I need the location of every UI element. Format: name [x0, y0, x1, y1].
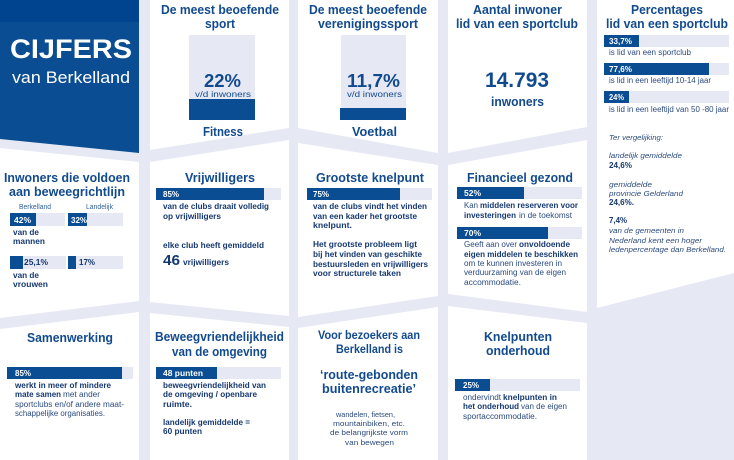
label: fitness: Fitness — [203, 125, 243, 139]
panel: samenwerking — [0, 312, 139, 460]
text block: het onderhoud — [463, 402, 519, 411]
text block: werkt in meer of mindere — [14, 381, 112, 390]
text block: schappelijke organisaties. — [15, 409, 105, 418]
text block — [163, 381, 266, 436]
text block: onvoldoende middelen: onvoldoende — [519, 240, 571, 249]
text block: ter vergelijking: ledenpercentage dan Berkelland. — [609, 245, 726, 254]
heading: Beweegvriendelijkheid — [155, 330, 284, 344]
text block: onvoldoende middelen: accommodatie. — [464, 278, 521, 287]
heading: Vrijwilligers — [185, 171, 255, 185]
text block: met ander — [63, 390, 100, 399]
heading: onderhoud — [486, 344, 550, 358]
heading: Percentages — [631, 3, 703, 17]
bar: 52% — [457, 187, 582, 199]
text block: onvoldoende middelen: Geeft aan over — [464, 240, 517, 249]
text block: reserveren: Kan — [464, 201, 478, 210]
bar chart: fitness 22%: 22% — [204, 71, 241, 91]
bar: 85% — [7, 367, 133, 379]
text block: ter vergelijking: 7,4% — [609, 216, 627, 225]
panel: de meest beoefende verenigingssport — [298, 0, 438, 153]
heading — [318, 330, 420, 356]
text block: landelijk gemiddelde = — [163, 418, 250, 427]
heading: Aantal inwoner — [473, 3, 562, 17]
panel: aantal inwoner lid van een sportclub — [448, 0, 587, 153]
heading: sport — [205, 17, 236, 31]
stat: 46 vrijwilligers: vrijwilligers — [183, 258, 230, 267]
bars: vrouwen — [10, 256, 123, 289]
text block: op vrijwilligers — [163, 212, 222, 221]
text block: ruimte. — [163, 400, 192, 409]
bar: 77,6% — [604, 63, 729, 85]
text block: ter vergelijking: provincie Gelderland — [608, 189, 684, 198]
heading — [456, 3, 578, 31]
heading: De meest beoefende — [309, 3, 427, 17]
text block: knelpunt. — [313, 221, 352, 230]
panel: knelpunten onderhoud — [448, 306, 587, 460]
text block: van de clubs draait volledig — [163, 202, 269, 211]
heading: van de omgeving — [172, 345, 267, 359]
panel: title banner — [0, 0, 139, 153]
text block: reserveren: investeringen — [464, 211, 516, 220]
bar: 75% — [307, 188, 432, 200]
text block: beweegvriendelijkheid van — [163, 381, 266, 390]
title: CIJFERS: CIJFERS — [10, 34, 132, 64]
text block: wandelen, fietsen, — [335, 410, 395, 419]
bar: 33,7%: 33,7% — [609, 37, 632, 46]
bars: vrouwen: van de — [13, 271, 40, 280]
heading: Samenwerking — [27, 331, 113, 345]
text block: sportaccommodatie. — [463, 412, 537, 421]
text block: ter vergelijking: gemiddelde — [609, 180, 652, 189]
bars: mannen: van de — [13, 228, 40, 237]
legend: Berkelland / Landelijk: Landelijk — [86, 204, 113, 211]
text block: de omgeving / openbare — [163, 390, 258, 399]
heading — [155, 330, 284, 359]
bar: 25% — [455, 379, 580, 391]
text block: mate samen — [15, 390, 61, 399]
heading: Voor bezoekers aan — [318, 330, 420, 342]
bar: 52%: 52% — [464, 189, 481, 198]
subtitle: van Berkelland — [12, 69, 130, 87]
bar chart: voetbal 11,7%: 11,7% — [347, 71, 400, 91]
heading: Financieel gezond — [467, 171, 573, 185]
text block: de belangrijkste vorm — [330, 428, 408, 437]
text block: 60 punten — [163, 427, 202, 436]
text block: ter vergelijking — [608, 133, 726, 254]
text block: ter vergelijking: 24,6%. — [609, 198, 634, 207]
panel: grootste knelpunt — [298, 143, 438, 317]
heading: Berkelland is — [336, 344, 403, 356]
heading: Knelpunten — [484, 330, 552, 344]
highlight: route-gebonden buitenrecreatie: ‘route-gebonden — [320, 368, 418, 382]
heading: lid van een sportclub — [456, 17, 578, 31]
label: voetbal: Voetbal — [352, 125, 397, 139]
text block: ter vergelijking: 24,6% — [609, 161, 632, 170]
heading: aan beweegrichtlijn — [9, 185, 125, 199]
text block: mountainbiken, etc. — [333, 419, 405, 428]
bar: 70%: 70% — [464, 229, 481, 238]
heading: Grootste knelpunt — [316, 171, 425, 185]
panel: voor bezoekers aan Berkelland — [298, 307, 438, 460]
text block: ter vergelijking: Ter vergelijking: — [609, 133, 663, 142]
heading — [484, 330, 552, 358]
text block: ondervindt — [463, 393, 502, 402]
panel: inwoners die voldoen aan beweegrichtlijn — [0, 148, 139, 318]
text block: reserveren: in de toekomst — [519, 211, 573, 220]
text block — [330, 410, 408, 447]
bars: mannen: mannen — [13, 237, 45, 246]
text block — [14, 381, 124, 418]
bar: 48 punten: 48 punten — [163, 369, 203, 378]
text block: elke club heeft gemiddeld — [163, 241, 264, 250]
bar: 70% — [457, 227, 582, 239]
text block: onvoldoende middelen: om te kunnen investeren in — [464, 259, 562, 268]
panel: de meest beoefende sport — [150, 0, 289, 150]
bar: 85%: 85% — [15, 369, 31, 378]
bar: 25%: 25% — [463, 381, 479, 390]
heading — [309, 3, 427, 31]
highlight: route-gebonden buitenrecreatie: buitenrecreatie’ — [322, 382, 416, 396]
text block: reserveren: middelen reserveren voor — [480, 201, 578, 210]
bar chart: fitness 22%: v/d inwoners — [195, 89, 251, 99]
bar: 85%: 85% — [163, 190, 179, 199]
text block: knelpunten in — [503, 393, 557, 402]
bars: mannen — [10, 213, 123, 246]
legend: Berkelland / Landelijk: Berkelland — [19, 204, 51, 211]
big number: 14.793 — [485, 69, 549, 92]
text block: ter vergelijking: landelijk gemiddelde — [609, 151, 682, 160]
stat: 46 vrijwilligers — [163, 252, 230, 269]
text block: van de clubs vindt het vinden — [313, 202, 427, 211]
heading: lid van een sportclub — [606, 17, 728, 31]
panel: vrijwilligers — [150, 140, 289, 316]
highlight: route-gebonden buitenrecreatie — [320, 368, 418, 396]
bars: vrouwen: vrouwen — [13, 280, 48, 289]
bar: 75%: 75% — [313, 190, 329, 199]
heading: Inwoners die voldoen — [4, 171, 130, 185]
text block: sportclubs en/of andere maat- — [15, 400, 124, 409]
bar: 33,7% — [604, 35, 729, 57]
bar: 24%: is lid in een leeftijd van 50 -80 jaar — [609, 105, 729, 114]
bar: 24% — [604, 91, 729, 114]
text block: van de eigen — [521, 402, 567, 411]
text block: onvoldoende middelen: verduurzaming van de eigen — [464, 268, 566, 277]
bar: 85% — [156, 188, 281, 200]
panel: percentages lid van een sportclub — [597, 0, 734, 308]
text block: bij het vinden van geschikte — [313, 250, 423, 259]
bar: 77,6%: 77,6% — [609, 65, 632, 74]
bar chart: voetbal 11,7% — [340, 35, 406, 120]
bar: 33,7%: is lid van een sportclub — [609, 48, 692, 57]
bar: 77,6%: is lid in een leeftijd 10-14 jaar — [609, 76, 711, 85]
text block: van bewegen — [345, 438, 394, 447]
bars: mannen: 42% — [14, 216, 31, 225]
text block: onvoldoende middelen: eigen middelen te beschikken — [464, 250, 578, 259]
bars: mannen: 32% — [71, 216, 87, 225]
bars: vrouwen: 25,1% — [24, 258, 48, 267]
panel: beweegvriendelijkheid — [150, 313, 289, 460]
label: inwoners: inwoners — [491, 95, 544, 109]
panel: financieel gezond — [448, 140, 587, 312]
text block — [163, 202, 269, 250]
text block: reserveren — [464, 201, 578, 220]
text block: Het grootste probleem ligt — [313, 240, 417, 249]
text block — [463, 393, 567, 421]
bar: 24%: 24% — [609, 93, 624, 102]
text block: ter vergelijking: van de gemeenten in — [609, 226, 684, 235]
text block: bestuursleden en vrijwilligers — [313, 260, 429, 269]
legend: Berkelland / Landelijk — [19, 204, 113, 211]
bar chart: fitness 22% — [189, 35, 255, 120]
heading — [4, 171, 130, 199]
text block: van een kader het grootste — [313, 212, 418, 221]
heading: verenigingssport — [318, 17, 419, 31]
bar chart: voetbal 11,7%: v/d inwoners — [347, 89, 402, 99]
text block: voor structurele taken — [313, 269, 401, 278]
bar: 48 punten — [156, 367, 281, 379]
text block: onvoldoende middelen — [464, 240, 578, 287]
heading — [606, 3, 728, 31]
text block: ter vergelijking: Nederland kent een hoger — [609, 236, 703, 245]
stat: 46 vrijwilligers: 46 — [163, 252, 180, 269]
bars: vrouwen: 17% — [79, 258, 95, 267]
text block — [313, 202, 429, 278]
heading: De meest beoefende — [161, 3, 279, 17]
heading — [161, 3, 279, 31]
